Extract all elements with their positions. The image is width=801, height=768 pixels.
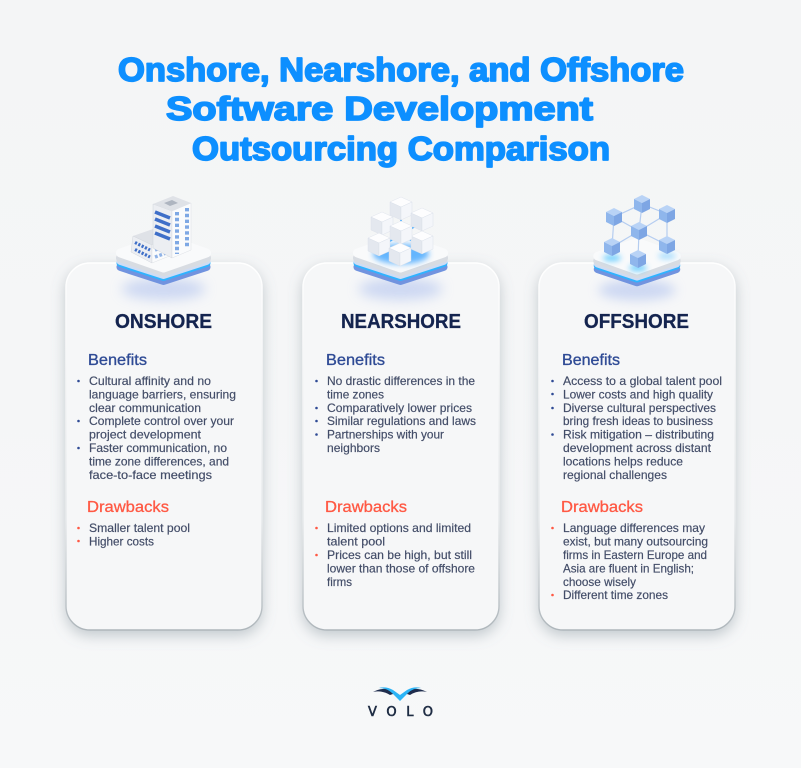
benefits list: Risk mitigation – distributing — [563, 428, 714, 442]
drawbacks list: choose wisely — [563, 576, 636, 589]
drawbacks heading: Drawbacks — [325, 499, 407, 516]
benefits list: time zone differences, and — [89, 456, 229, 468]
benefits list: locations helps reduce — [563, 456, 683, 468]
icon: connected blue cubes on platform — [597, 195, 677, 300]
benefits list: Faster communication, no — [89, 442, 227, 455]
heading: onshore: ONSHORE — [115, 311, 212, 333]
drawbacks list: Higher costs — [89, 536, 154, 548]
benefits heading: Benefits — [326, 352, 385, 369]
drawbacks list: Smaller talent pool — [89, 522, 190, 535]
title: Software Development — [166, 90, 593, 127]
benefits list: face-to-face meetings — [89, 469, 212, 482]
drawbacks list: Limited options and limited — [327, 522, 471, 535]
icon: office buildings on platform — [120, 196, 206, 300]
drawbacks list: Language differences may — [563, 522, 705, 535]
onshore card background — [66, 263, 262, 630]
nearshore card background — [303, 263, 499, 630]
benefits list — [551, 375, 722, 482]
wordmark: VOLO — [368, 705, 433, 720]
benefits heading: Benefits — [88, 352, 147, 369]
icon: bird wings — [373, 687, 427, 701]
benefits list: Diverse cultural perspectives — [563, 402, 716, 415]
title — [118, 51, 684, 167]
drawbacks list: lower than those of offshore — [327, 562, 475, 576]
benefits list: Access to a global talent pool — [563, 375, 722, 388]
benefits list: bring fresh ideas to business — [563, 415, 713, 428]
benefits list: neighbors — [327, 442, 380, 455]
panel: onshore — [66, 196, 262, 630]
benefits list: development across distant — [563, 442, 712, 455]
benefits list — [77, 375, 236, 482]
drawbacks heading: Drawbacks — [561, 499, 643, 516]
drawbacks list: talent pool — [327, 536, 385, 548]
drawbacks list: Different time zones — [563, 589, 668, 602]
drawbacks list: Prices can be high, but still — [327, 549, 472, 562]
drawbacks list — [551, 522, 708, 602]
drawbacks list — [77, 522, 190, 548]
benefits list: Similar regulations and laws — [327, 415, 476, 428]
benefits list — [315, 375, 476, 455]
title: Onshore, Nearshore, and Offshore — [118, 51, 684, 88]
panel: nearshore — [303, 197, 499, 630]
benefits list: language barriers, ensuring — [89, 388, 236, 402]
benefits list: Lower costs and high quality — [563, 388, 713, 402]
benefits list: No drastic differences in the — [327, 375, 475, 388]
benefits list: Comparatively lower prices — [327, 402, 472, 415]
drawbacks heading: Drawbacks — [87, 499, 169, 516]
logo: VOLO — [368, 687, 433, 720]
benefits list: Complete control over your — [89, 415, 234, 428]
benefits list: Partnerships with your — [327, 428, 444, 442]
benefits list: regional challenges — [563, 469, 667, 482]
drawbacks list: Asia are fluent in English; — [563, 562, 694, 576]
drawbacks list: firms in Eastern Europe and — [563, 549, 707, 562]
drawbacks list: exist, but many outsourcing — [563, 536, 708, 548]
heading: offshore: OFFSHORE — [584, 311, 689, 333]
panel: offshore — [539, 195, 735, 630]
icon: white cubes on platform — [358, 197, 444, 300]
title: Outsourcing Comparison — [192, 130, 610, 167]
benefits heading: Benefits — [562, 352, 620, 369]
offshore card background — [539, 263, 735, 630]
heading: nearshore: NEARSHORE — [341, 311, 461, 333]
benefits list: clear communication — [89, 402, 201, 415]
drawbacks list: firms — [327, 576, 352, 589]
benefits list: Cultural affinity and no — [89, 375, 211, 388]
drawbacks list — [315, 522, 475, 589]
benefits list: project development — [89, 428, 202, 442]
benefits list: time zones — [327, 388, 384, 402]
